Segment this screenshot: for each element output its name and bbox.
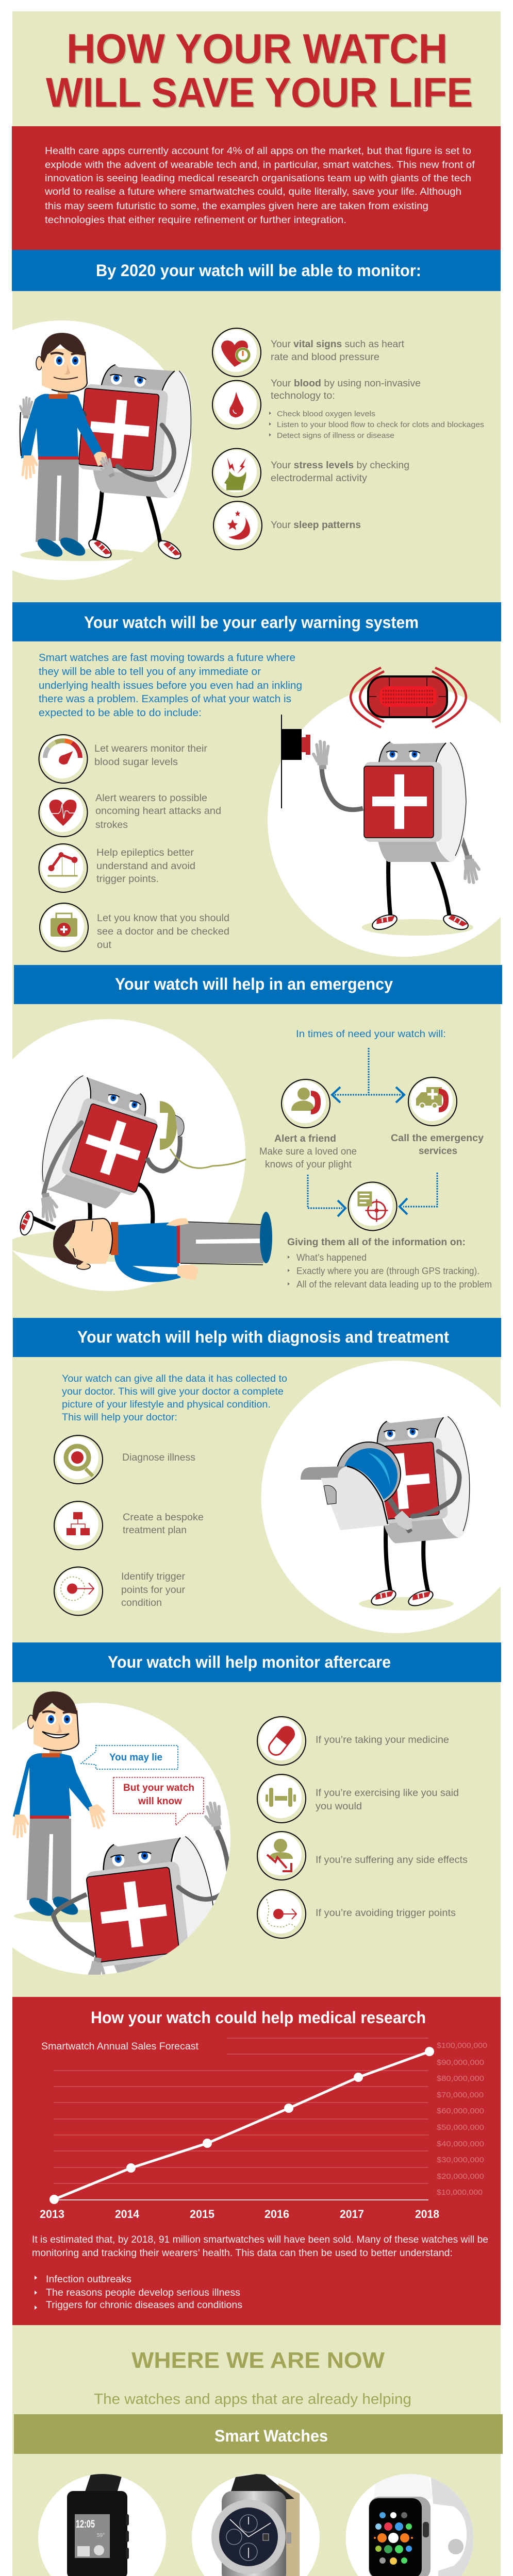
icon: heart ecg	[39, 788, 88, 837]
line chart: sales forecast: 2017	[340, 2208, 364, 2221]
text: giving information: What’s happened	[296, 1252, 367, 1263]
alarm button	[281, 715, 310, 808]
icon: side effects	[257, 1832, 306, 1880]
text: early warning intro: Smart watches are fast moving towards a future where	[39, 652, 295, 664]
icon: alert friend	[282, 1079, 330, 1128]
panel: diagnosis and treatment	[13, 1318, 513, 1633]
list: research uses: Triggers for chronic diseases and conditions	[46, 2300, 242, 2311]
text: alert a friend: knows of your plight	[265, 1159, 352, 1170]
band heading	[12, 250, 501, 291]
text: exercising: If you’re exercising like you said	[316, 1788, 459, 1799]
title: WILL SAVE YOUR LIFE	[46, 70, 473, 116]
text: heart attacks: oncoming heart attacks and	[95, 806, 221, 817]
text: exercising	[316, 1788, 459, 1812]
band heading	[13, 1318, 501, 1357]
line chart: sales forecast	[40, 2038, 487, 2221]
text: diagnose illness: Diagnose illness	[122, 1452, 195, 1463]
panel: smart watches	[14, 2414, 503, 2576]
text: diagnosis intro: This will help your doctor:	[62, 1412, 177, 1423]
alarm siren	[351, 668, 466, 727]
illustration: man with watch	[0, 320, 197, 580]
list: blood checks	[269, 410, 484, 440]
speech bubble: but your watch will know: will know	[138, 1796, 182, 1807]
band heading: Your watch will be your early warning system	[84, 613, 419, 632]
text: bespoke treatment plan: treatment plan	[123, 1525, 187, 1536]
text: heart attacks: Alert wearers to possible	[95, 793, 207, 804]
text: giving information: Exactly where you are (through GPS tracking).	[296, 1265, 479, 1276]
icon: stress	[212, 448, 261, 497]
line chart: sales forecast: $10,000,000	[437, 2188, 483, 2197]
intro text: technologies that either require refinement or further integration.	[45, 215, 346, 226]
line chart: sales forecast: $40,000,000	[437, 2140, 484, 2148]
band heading: Smart Watches	[214, 2427, 328, 2445]
photo: Apple Watch	[345, 2473, 477, 2576]
heading: medical research: How your watch could help medical research	[91, 2008, 426, 2027]
line chart: sales forecast: $100,000,000	[437, 2041, 487, 2050]
line chart: sales forecast: 2013	[40, 2208, 64, 2221]
band heading	[12, 1642, 501, 1682]
icon: ambulance	[408, 1077, 457, 1126]
text: sleep: Your sleep patterns	[271, 520, 361, 531]
icon: treatment plan chart	[54, 1501, 103, 1550]
text: diagnosis intro: your doctor. This will give your doctor a complete	[62, 1386, 284, 1397]
line chart: sales forecast: $70,000,000	[437, 2091, 484, 2099]
text: blood sugar	[94, 743, 208, 768]
line chart: sales forecast: 2015	[190, 2208, 214, 2221]
icon: pill	[257, 1717, 306, 1765]
icon: data and location	[349, 1182, 397, 1230]
chart title: Smartwatch Annual Sales Forecast	[41, 2041, 199, 2052]
text: research estimate: It is estimated that, by 2018, 91 million smartwatches will have been sold. Many of these watches will be	[32, 2234, 488, 2245]
panel: intro	[12, 126, 501, 250]
photo: SmartWatch: 59°	[97, 2533, 105, 2538]
text: stress: Your stress levels by checking	[271, 460, 409, 471]
text: exercising: you would	[316, 1801, 362, 1812]
panel: early warning	[12, 602, 513, 957]
text: in times of need: In times of need your watch will:	[296, 1029, 446, 1040]
text: blood sugar: blood sugar levels	[94, 757, 178, 768]
band heading: By 2020 your watch will be able to monitor:	[96, 261, 421, 280]
icon: medical kit	[40, 903, 88, 952]
text: avoiding trigger: If you’re avoiding trigger points	[316, 1908, 456, 1919]
speech bubble: you may lie: You may lie	[109, 1752, 162, 1763]
illustration: man and watch	[12, 1691, 230, 1975]
text: early warning intro: underlying health issues before you even had an inkling	[39, 680, 302, 691]
text: trigger points: Identify trigger	[121, 1571, 186, 1582]
text: call emergency services	[391, 1133, 484, 1157]
text: research estimate	[32, 2234, 488, 2259]
intro text: Health care apps currently account for 4% of all apps on the market, but that figure is set to	[45, 146, 471, 157]
intro text: this may seem futuristic to some, the examples given here are taken from existing	[45, 201, 428, 212]
intro text: world to realise a future where smartwatches could, quite literally, save your life. Although	[44, 187, 461, 197]
photo: SmartWatch: 12:05	[76, 2518, 95, 2530]
text: see a doctor: Let you know that you should	[97, 913, 229, 924]
illustration: watch with alarm	[268, 668, 513, 957]
text: early warning intro	[39, 652, 302, 719]
icon: magnifier target	[54, 1435, 103, 1484]
text: trigger points: condition	[121, 1598, 162, 1608]
line chart: sales forecast: $90,000,000	[437, 2058, 484, 2067]
text: see a doctor	[97, 913, 229, 951]
icon: avoiding trigger	[257, 1890, 306, 1938]
band heading: Your watch will help in an emergency	[115, 975, 393, 993]
text: epileptics: Help epileptics better	[96, 848, 194, 858]
text: trigger points: points for your	[121, 1585, 186, 1596]
text: taking medicine: If you’re taking your medicine	[316, 1735, 449, 1745]
text: blood: technology to:	[271, 391, 335, 401]
text: epileptics	[96, 848, 195, 885]
text: diagnosis intro	[62, 1374, 287, 1423]
text: see a doctor: see a doctor and be checked	[97, 926, 229, 937]
text: blood: Your blood by using non-invasive	[271, 378, 421, 389]
intro text: innovation is seeing leading medical research organisations team up with giants of the tech	[45, 173, 471, 184]
band heading: Your watch will help with diagnosis and treatment	[77, 1328, 449, 1346]
text: vital signs: rate and blood pressure	[271, 352, 379, 363]
panel: emergency	[0, 965, 502, 1291]
text: early warning intro: they will be able to tell you of any immediate or	[39, 666, 261, 677]
text: early warning intro: expected to be able to do include:	[39, 707, 202, 719]
flow arrows	[308, 1048, 437, 1216]
line chart: sales forecast: $20,000,000	[437, 2172, 484, 2181]
icon: sleep	[213, 501, 262, 550]
text: diagnosis intro: picture of your lifestyle and physical condition.	[62, 1399, 271, 1410]
list: research uses	[35, 2274, 242, 2311]
panel: aftercare	[0, 1642, 501, 1991]
line chart: sales forecast: 2016	[264, 2208, 289, 2221]
line chart: sales forecast: 2018	[415, 2208, 439, 2221]
text: alert a friend: Make sure a loved one	[259, 1146, 357, 1157]
line chart: sales forecast: $60,000,000	[437, 2107, 484, 2115]
watch with pointing hand	[54, 1802, 229, 1991]
band heading	[12, 602, 501, 641]
text: alert a friend: Alert a friend	[274, 1133, 336, 1144]
speech bubble: but your watch will know	[113, 1777, 204, 1825]
text: giving information	[287, 1237, 492, 1290]
band heading: Your watch will help monitor aftercare	[108, 1653, 391, 1671]
illustration: watch calling for help	[0, 1019, 284, 1291]
text: diagnosis intro: Your watch can give all the data it has collected to	[62, 1374, 287, 1384]
icon: gauge	[39, 735, 88, 783]
list: blood checks: Listen to your blood flow to check for clots and blockages	[277, 420, 484, 429]
text: call emergency services: Call the emergency	[391, 1133, 484, 1144]
text: bespoke treatment plan: Create a bespoke	[123, 1512, 204, 1523]
text: trigger points	[121, 1571, 186, 1608]
text: call emergency services: services	[419, 1146, 457, 1157]
text: research estimate: monitoring and tracking their wearers’ health. This data can then be used to better understand:	[32, 2248, 453, 2259]
text: alert a friend	[259, 1133, 357, 1170]
text: stress: electrodermal activity	[271, 473, 368, 484]
text: side effects: If you’re suffering any side effects	[316, 1855, 468, 1866]
band heading	[14, 2414, 503, 2454]
text: stress	[271, 460, 409, 484]
intro text	[44, 146, 475, 226]
text: blood sugar: Let wearers monitor their	[94, 743, 208, 754]
man lying down	[53, 1212, 272, 1282]
text: epileptics: understand and avoid	[96, 861, 195, 872]
text: early warning intro: there was a problem. Examples of what your watch is	[39, 693, 291, 705]
icon: trigger point	[54, 1567, 103, 1616]
photo: LG Urbane	[192, 2473, 320, 2576]
text: epileptics: trigger points.	[96, 874, 159, 885]
magnifying glass	[337, 1442, 410, 1532]
subheading: The watches and apps that are already helping	[94, 2391, 411, 2408]
illustration: watch with magnifier	[261, 1361, 513, 1633]
line chart: sales forecast: 2014	[115, 2208, 140, 2221]
list: research uses: The reasons people develop serious illness	[46, 2287, 240, 2298]
text: bespoke treatment plan	[123, 1512, 204, 1536]
intro text: explode with the advent of wearable tech and, in particular, smart watches. This new front of	[45, 160, 475, 171]
list: blood checks: Check blood oxygen levels	[277, 410, 375, 418]
icon: heart and gauge	[212, 328, 261, 377]
list: research uses: Infection outbreaks	[46, 2274, 131, 2285]
line chart: sales forecast: $50,000,000	[437, 2123, 484, 2132]
line chart: sales forecast: $30,000,000	[437, 2156, 484, 2164]
title	[46, 26, 473, 116]
photo: SmartWatch	[38, 2473, 166, 2576]
text: see a doctor: out	[97, 940, 112, 951]
panel: by 2020	[0, 250, 501, 580]
text: heart attacks	[95, 793, 221, 831]
speech bubble: but your watch will know: But your watch	[123, 1783, 194, 1793]
speech bubble: you may lie	[81, 1745, 178, 1769]
text: vital signs: Your vital signs such as heart	[271, 339, 405, 350]
text: heart attacks: strokes	[95, 820, 128, 831]
text: giving information: All of the relevant data leading up to the problem	[296, 1279, 492, 1290]
band heading	[14, 965, 502, 1004]
icon: epilepsy chart	[39, 844, 88, 892]
title: HOW YOUR WATCH	[67, 26, 448, 72]
line chart: sales forecast: $80,000,000	[437, 2074, 484, 2083]
heading: where we are now: WHERE WE ARE NOW	[131, 2348, 385, 2373]
list: blood checks: Detect signs of illness or disease	[277, 431, 394, 440]
clipboard paper	[301, 1466, 389, 1530]
telephone handset	[160, 1101, 246, 1168]
text: vital signs	[271, 339, 405, 363]
text: giving information: Giving them all of the information on:	[287, 1237, 466, 1248]
text: blood	[271, 378, 421, 401]
panel: medical research	[12, 1997, 501, 2325]
icon: blood drop	[212, 380, 261, 429]
icon: dumbbell	[257, 1774, 306, 1823]
